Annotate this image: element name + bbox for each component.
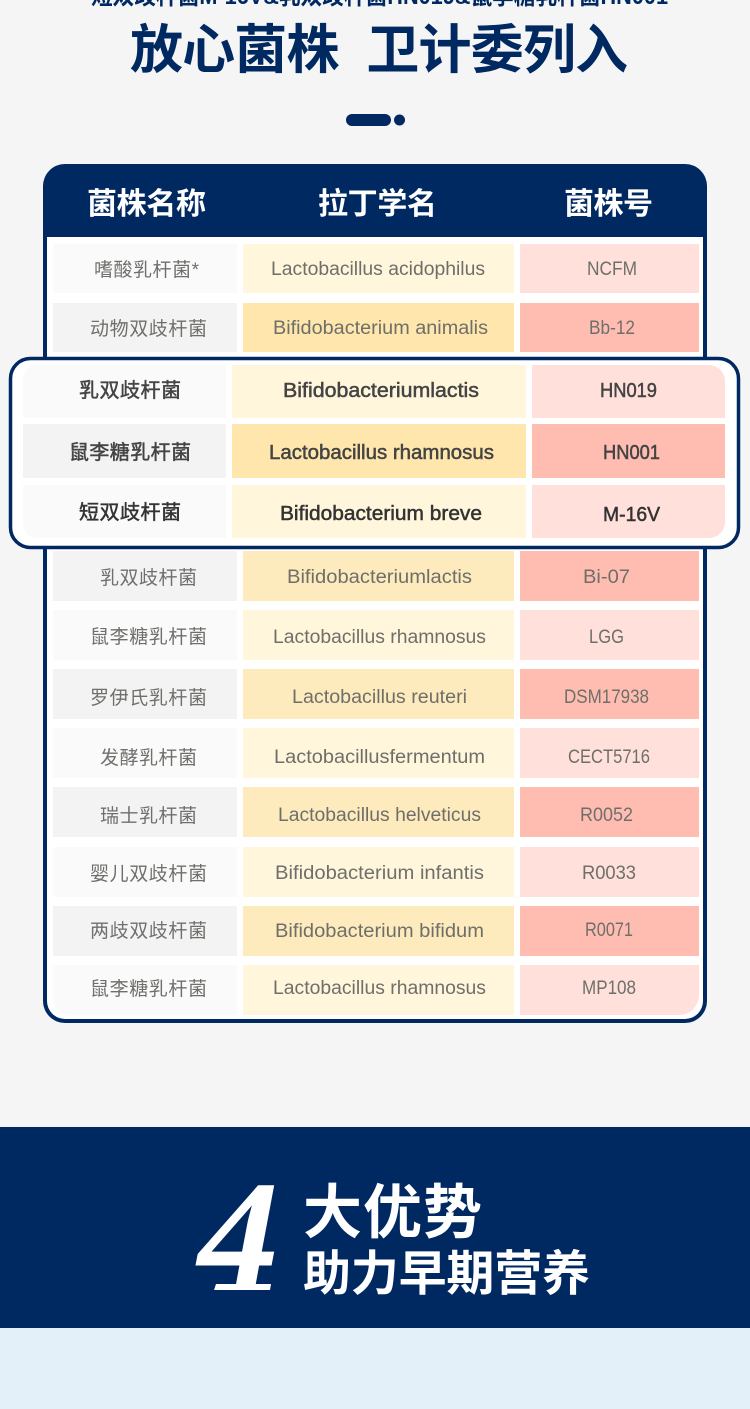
row: 动物双歧杆菌: Bb-12 [589,318,635,339]
row: 瑞士乳杆菌: 瑞士乳杆菌 [100,805,197,827]
row: 鼠李糖乳杆菌 HN001: 鼠李糖乳杆菌 [69,441,191,464]
row: 婴儿双歧杆菌: 婴儿双歧杆菌 [90,863,207,885]
row: 短双歧杆菌 M-16V: M-16V [603,504,661,526]
table body [47,237,703,1019]
row: 鼠李糖乳杆菌 HN001 [23,424,725,478]
highlight frame [10,358,738,548]
row: 鼠李糖乳杆菌 LGG [53,610,699,660]
row: 两歧双歧杆菌: R0071 [585,920,633,941]
row: 鼠李糖乳杆菌 MP108: Lactobacillus rhamnosus [273,978,486,999]
banner heading: 助力早期营养 [303,1248,590,1301]
row: 乳双歧杆菌 Bi-07: Bifidobacteriumlactis [287,567,472,588]
row: 动物双歧杆菌 [53,303,699,352]
row: 发酵乳杆菌: Lactobacillusfermentum [274,747,485,768]
row: 动物双歧杆菌: 动物双歧杆菌 [90,318,207,340]
row: 鼠李糖乳杆菌 LGG: 鼠李糖乳杆菌 [90,626,207,648]
row: 鼠李糖乳杆菌 MP108 [53,965,699,1015]
row: 乳双歧杆菌 HN019: Bifidobacteriumlactis [283,380,479,402]
row: 乳双歧杆菌 Bi-07: 乳双歧杆菌 [100,567,197,589]
row: 罗伊氏乳杆菌: DSM17938 [564,687,649,708]
table panel [43,164,707,1023]
highlight panel [10,358,738,548]
row: 瑞士乳杆菌 [53,787,699,837]
title: 放心菌株 卫计委列入 [130,21,628,80]
row: 乳双歧杆菌 Bi-07 [53,551,699,601]
row: 瑞士乳杆菌: R0052 [580,805,633,826]
row: 鼠李糖乳杆菌 MP108: MP108 [582,978,636,999]
row: 嗜酸乳杆菌: Lactobacillus acidophilus [271,259,485,280]
row: 罗伊氏乳杆菌: Lactobacillus reuteri [292,687,467,708]
row: 罗伊氏乳杆菌 [53,669,699,719]
row: 嗜酸乳杆菌: NCFM [587,259,637,280]
row: 乳双歧杆菌 HN019: 乳双歧杆菌 [79,379,181,402]
row: 嗜酸乳杆菌 [53,244,699,293]
banner numeral: 4 [195,1151,279,1320]
row: 两歧双歧杆菌: 两歧双歧杆菌 [90,920,207,942]
banner heading [303,1180,590,1301]
row: 乳双歧杆菌 HN019: HN019 [600,380,657,402]
row: 短双歧杆菌 M-16V: 短双歧杆菌 [79,501,181,524]
row: 鼠李糖乳杆菌 MP108: 鼠李糖乳杆菌 [90,978,207,1000]
next section background [0,1328,750,1409]
table frame [43,164,707,1023]
table header [87,188,653,221]
row: 瑞士乳杆菌: Lactobacillus helveticus [278,805,481,826]
row: 短双歧杆菌 M-16V [23,485,725,538]
row: 两歧双歧杆菌: Bifidobacterium bifidum [275,921,484,942]
row: 乳双歧杆菌 Bi-07: Bi-07 [583,567,630,588]
table header: 菌株名称 [87,188,206,221]
row: 鼠李糖乳杆菌 LGG: Lactobacillus rhamnosus [273,627,486,648]
row: 短双歧杆菌 M-16V: Bifidobacterium breve [280,503,482,525]
row: 乳双歧杆菌 HN019 [23,365,725,418]
banner heading: 大优势 [303,1180,482,1246]
row: 鼠李糖乳杆菌 LGG: LGG [589,627,624,648]
row: 婴儿双歧杆菌: R0033 [582,863,636,884]
table header: 拉丁学名 [318,188,437,221]
row: 鼠李糖乳杆菌 HN001: HN001 [603,442,660,464]
row: 婴儿双歧杆菌: Bifidobacterium infantis [275,863,484,884]
row: 动物双歧杆菌: Bifidobacterium animalis [273,318,488,339]
row: 嗜酸乳杆菌: 嗜酸乳杆菌* [94,259,200,281]
row: 发酵乳杆菌: 发酵乳杆菌 [100,747,197,769]
row: 鼠李糖乳杆菌 HN001: Lactobacillus rhamnosus [269,442,494,464]
table header: 菌株号 [564,188,653,221]
title divider [346,114,405,126]
row: 两歧双歧杆菌 [53,906,699,956]
row: 发酵乳杆菌 [53,728,699,778]
row: 罗伊氏乳杆菌: 罗伊氏乳杆菌 [90,687,207,709]
row: 婴儿双歧杆菌 [53,847,699,897]
banner [0,1127,750,1328]
row: 发酵乳杆菌: CECT5716 [568,747,650,768]
